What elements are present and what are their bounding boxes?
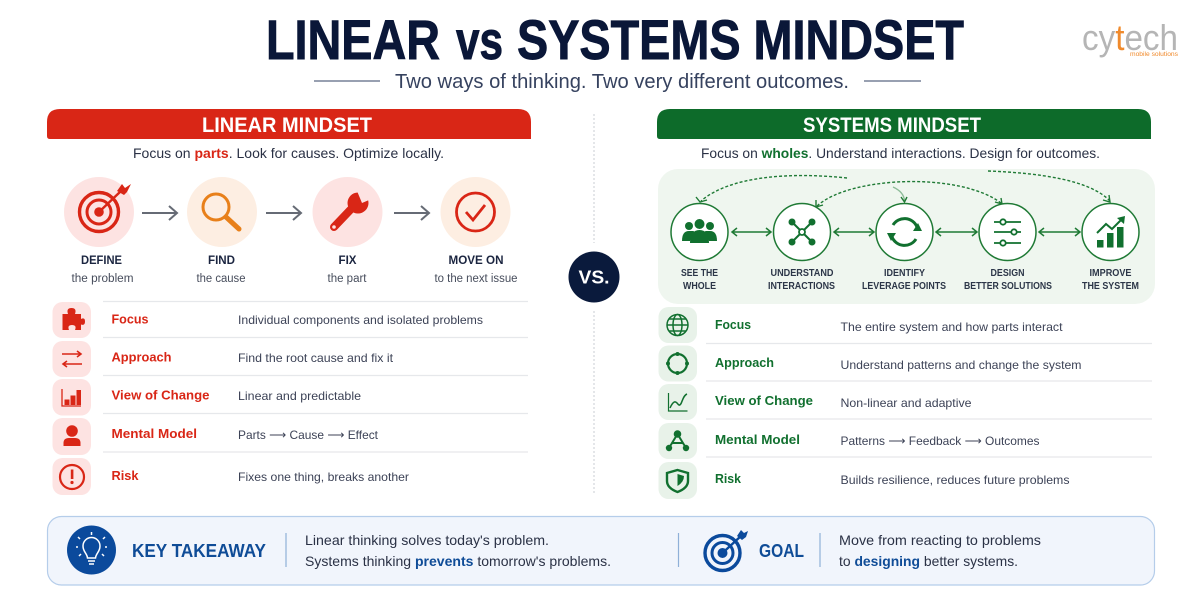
node: design better solutions: BETTER SOLUTIONS xyxy=(964,281,1052,292)
row: view of change xyxy=(658,384,972,420)
systems header bar xyxy=(657,109,1151,139)
step: find: the cause xyxy=(196,273,246,285)
systems header bar: SYSTEMS MINDSET xyxy=(803,113,981,137)
row: approach: Find the root cause and fix it xyxy=(238,351,394,365)
row: approach: Approach xyxy=(112,350,172,364)
row: risk xyxy=(658,462,1070,499)
subtitle: Two ways of thinking. Two very different outcomes. xyxy=(395,71,849,93)
step: fix: the part xyxy=(328,273,367,285)
step: move on: MOVE ON xyxy=(448,253,504,267)
row: risk: Risk xyxy=(715,471,742,486)
row: focus xyxy=(52,302,483,338)
icon: light bulb xyxy=(67,526,116,574)
row: risk: Risk xyxy=(112,468,139,483)
node: design better solutions xyxy=(964,204,1052,292)
logo: cytech: cytech xyxy=(1082,17,1178,58)
arrow xyxy=(142,206,177,220)
goal text: Move from reacting to problems xyxy=(839,532,1041,548)
icon: goal target xyxy=(705,530,748,570)
row: risk: Builds resilience, reduces future problems xyxy=(840,473,1070,487)
row: focus: Individual components and isolated problems xyxy=(238,313,483,327)
row: approach: Understand patterns and change the system xyxy=(840,358,1082,372)
panel: bottom takeaway band xyxy=(48,516,1154,585)
row: risk: Fixes one thing, breaks another xyxy=(238,470,409,484)
step: move on xyxy=(434,177,518,285)
step: define: the problem xyxy=(72,273,134,285)
systems tagline: Focus on wholes. Understand interactions. Design for outcomes. xyxy=(701,145,1100,161)
title: LINEAR xyxy=(266,8,440,71)
row: approach xyxy=(658,346,1082,382)
row: view of change: View of Change xyxy=(715,393,813,408)
node: design better solutions: DESIGN xyxy=(990,268,1024,279)
node: identify leverage points: IDENTIFY xyxy=(884,268,925,279)
row: mental model xyxy=(658,423,1040,459)
goal heading: GOAL xyxy=(759,541,804,561)
step: move on: to the next issue xyxy=(434,273,518,285)
node: understand interactions: UNDERSTAND xyxy=(770,268,834,279)
node: improve the system: IMPROVE xyxy=(1090,268,1132,279)
row: focus xyxy=(658,307,1063,343)
feedback arrows xyxy=(696,171,1110,236)
node: identify leverage points xyxy=(862,204,946,292)
title: vs xyxy=(456,11,503,71)
step: define: DEFINE xyxy=(81,253,122,267)
vs divider badge: VS. xyxy=(578,268,610,288)
title: SYSTEMS MINDSET xyxy=(517,8,964,71)
linear tagline: Focus on parts. Look for causes. Optimize locally. xyxy=(133,145,444,161)
row: focus: Focus xyxy=(715,317,751,332)
step: fix: FIX xyxy=(338,253,356,267)
row: mental model: Mental Model xyxy=(112,426,197,441)
row: mental model: Parts ⟶ Cause ⟶ Effect xyxy=(238,428,379,442)
row: view of change: Linear and predictable xyxy=(238,389,361,403)
step: fix xyxy=(312,177,382,285)
vs divider badge xyxy=(568,114,620,493)
linear header bar xyxy=(47,109,531,139)
node: see the whole xyxy=(671,204,728,292)
panel: linear mindset xyxy=(47,109,531,495)
row: mental model: Mental Model xyxy=(715,432,800,447)
linear header bar: LINEAR MINDSET xyxy=(202,113,372,137)
systems flow diagram xyxy=(658,169,1155,304)
row: view of change: View of Change xyxy=(112,388,210,402)
row: risk xyxy=(52,458,409,495)
node: improve the system xyxy=(1082,204,1139,292)
row: approach xyxy=(52,341,394,377)
node: understand interactions: INTERACTIONS xyxy=(768,281,835,292)
row: focus: Focus xyxy=(112,312,148,326)
key takeaway text xyxy=(305,532,611,569)
row: approach: Approach xyxy=(715,355,774,370)
node: understand interactions xyxy=(768,204,835,292)
step: find xyxy=(187,177,257,285)
node: see the whole: WHOLE xyxy=(683,281,716,292)
arrow xyxy=(394,206,429,220)
goal text xyxy=(839,532,1041,569)
goal text: to designing better systems. xyxy=(839,553,1018,569)
key takeaway text: Systems thinking prevents tomorrow's problems. xyxy=(305,553,611,569)
row: mental model: Patterns ⟶ Feedback ⟶ Outcomes xyxy=(840,434,1040,448)
row: view of change: Non-linear and adaptive xyxy=(840,396,972,410)
arrow xyxy=(266,206,301,220)
row: mental model xyxy=(52,418,379,455)
title xyxy=(266,8,964,71)
panel: systems mindset xyxy=(657,109,1155,499)
node: see the whole: SEE THE xyxy=(681,268,718,279)
row: view of change xyxy=(52,379,361,416)
key takeaway heading: KEY TAKEAWAY xyxy=(132,541,266,561)
step: find: FIND xyxy=(208,253,235,267)
step: define xyxy=(64,177,134,285)
node: improve the system: THE SYSTEM xyxy=(1082,281,1139,292)
logo: cytech: mobile solutions xyxy=(1130,51,1179,58)
node: identify leverage points: LEVERAGE POINTS xyxy=(862,281,946,292)
key takeaway text: Linear thinking solves today's problem. xyxy=(305,532,549,548)
row: focus: The entire system and how parts interact xyxy=(840,320,1063,334)
